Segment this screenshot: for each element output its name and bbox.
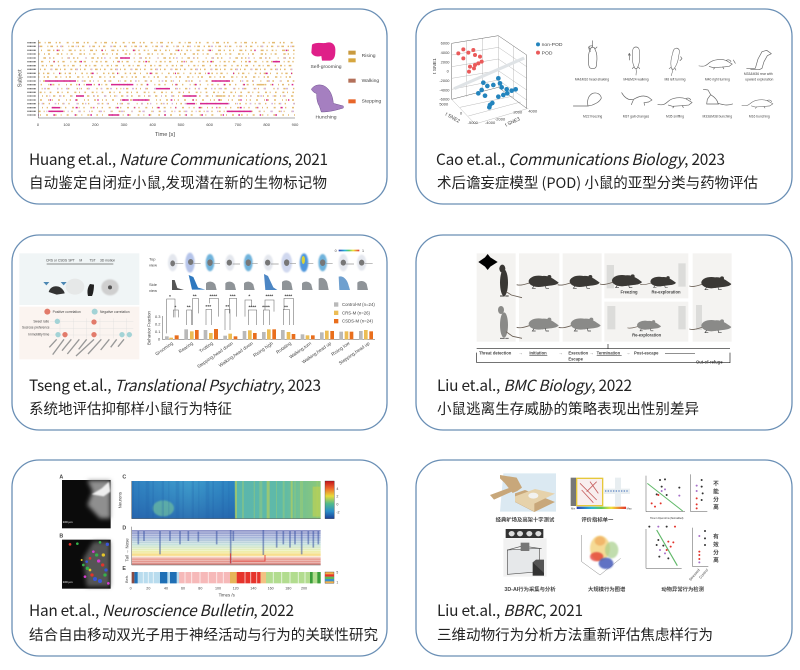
description: 系统地评估抑郁样小鼠行为特征 <box>29 398 232 419</box>
body trace D: Tail → Nose <box>125 538 130 562</box>
escape sequence illustration: Out-of-refuge <box>696 359 723 364</box>
behaviour fraction bar chart: ** <box>284 305 288 311</box>
behaviour fraction bar chart: Walking,head up <box>301 340 333 365</box>
3D t-SNE scatter plot: -4000 <box>485 120 496 125</box>
description: 自动鉴定自闭症小鼠,发现潜在新的生物标记物 <box>29 172 327 193</box>
workflow and correlation figure: CRS or CSDS <box>46 258 68 262</box>
scatter plots: not separable: Time in Open Arms (Normalized) <box>650 516 683 520</box>
ethogram E: Times /s <box>219 593 235 598</box>
behaviour fraction bar chart: 0 <box>158 336 161 341</box>
two-photon images A and B <box>59 474 111 589</box>
description: 三维动物行为分析方法重新评估焦虑样行为 <box>437 624 713 645</box>
workflow and correlation figure: Immobility time <box>28 332 50 336</box>
workflow and correlation figure <box>19 253 139 359</box>
behaviour mouse sketches: M33&M38 bunching <box>703 114 732 118</box>
scatter plots: not separable: 能 <box>713 487 719 495</box>
3D t-SNE scatter plot: t SNE3 <box>504 116 521 128</box>
citation: Han et.al., Neuroscience Bulletin, 2022 <box>29 599 294 621</box>
two-photon images A and B: B <box>59 534 63 540</box>
panel: Han et al. <box>12 460 387 656</box>
scatter plots: separable: 分 <box>713 548 719 556</box>
ethogram E: 5 <box>336 571 338 575</box>
behaviour fraction bar chart: Walking,turn <box>288 340 313 360</box>
escape sequence illustration: Initiation <box>529 350 547 355</box>
scatter plots: separable: 动物异常行为检测 <box>661 585 704 593</box>
3D t-SNE scatter plot: 5000 <box>439 101 449 106</box>
raster chart of behaviours: 100 <box>63 122 71 127</box>
workflow and correlation figure: Positive correlation <box>53 310 81 314</box>
ethogram E: Beh. <box>124 575 129 583</box>
3D t-SNE scatter plot: non-POD <box>542 42 563 48</box>
3D t-SNE scatter plot <box>432 36 563 128</box>
two-photon images A and B: 100 µm <box>63 580 73 584</box>
two-photon images A and B: A <box>59 474 63 480</box>
body trace D: D <box>122 526 126 532</box>
behaviour fraction bar chart: ** <box>193 294 197 300</box>
ethogram E: E <box>122 566 126 572</box>
neuron activity heatmap C <box>117 474 340 519</box>
behaviour fraction bar chart: Rearing <box>178 340 194 354</box>
behaviour mouse sketches: M8 left turning <box>664 78 686 82</box>
behaviour atlas <box>582 535 626 593</box>
3D t-SNE scatter plot: 0 <box>447 69 450 74</box>
behaviour fraction bar chart: **** <box>262 305 270 311</box>
behaviour fraction bar chart: Behavior Fraction <box>147 310 152 345</box>
behaviour fraction bar chart: Stepping,head down <box>196 340 234 369</box>
neuron activity heatmap C: 4 <box>336 487 338 491</box>
3D t-SNE scatter plot: -2000 <box>439 78 450 83</box>
behaviour fraction bar chart: Grooming <box>154 340 174 357</box>
workflow and correlation figure: Sucrose preference <box>22 326 50 330</box>
3D t-SNE scatter plot: 4000 <box>441 50 450 55</box>
behaviour mouse sketches <box>573 41 774 118</box>
maze illustration <box>490 473 556 523</box>
escape sequence illustration: Termination <box>597 350 621 355</box>
citation: Liu et.al., BMC Biology, 2022 <box>437 374 632 396</box>
workflow and correlation figure: Negative correlation <box>100 310 130 314</box>
legend with mice: Walking <box>362 78 379 84</box>
escape sequence illustration: Re-exploration <box>632 332 662 337</box>
ethogram E: 40 <box>164 587 168 591</box>
ethogram E <box>122 566 338 598</box>
behaviour fraction bar chart: Rising high <box>252 340 274 358</box>
behaviour fraction bar chart: *** <box>205 304 211 310</box>
3D t-SNE scatter plot: 4000 <box>528 109 538 114</box>
behaviour fraction bar chart: Walking,head down <box>218 340 254 368</box>
behaviour mouse sketches: M40 right turning <box>705 78 730 82</box>
panel: Tseng et al. <box>12 235 387 430</box>
behaviour fraction bar chart: 0.3 <box>155 314 161 319</box>
ethogram E: 80 <box>198 587 202 591</box>
behaviour fraction bar chart: Rotating <box>275 340 293 355</box>
scatter plots: not separable <box>646 474 719 520</box>
ethogram E: 100 <box>215 587 221 591</box>
raster chart of behaviours: 400 <box>149 122 157 127</box>
behaviour mouse sketches: M37 gait-changes <box>623 114 650 118</box>
workflow and correlation figure: 3D motion <box>100 258 115 262</box>
behaviour fraction bar chart: * <box>174 305 176 311</box>
raster chart of behaviours: 900 <box>292 122 299 127</box>
ethogram E: 0 <box>130 587 132 591</box>
escape sequence illustration: → <box>558 350 562 355</box>
raster chart of behaviours: Subject <box>18 69 24 87</box>
trajectory metric: Max <box>627 506 632 510</box>
behaviour mouse sketches: M16 bunching <box>749 114 770 118</box>
behaviour fraction bar chart <box>147 294 375 369</box>
behaviour fraction bar chart: **** <box>265 294 273 300</box>
behaviour fraction bar chart: 0.1 <box>155 329 161 334</box>
panel: Liu et al. BBRC <box>416 460 792 656</box>
trajectory metric <box>571 478 632 523</box>
legend with mice: Hunching <box>315 115 337 121</box>
behaviour atlas: 大规模行为图谱 <box>588 585 626 593</box>
scatter plots: not separable: 不 <box>713 480 719 487</box>
3D t-SNE scatter plot: -2000 <box>495 117 506 122</box>
behaviour fraction bar chart: **** <box>209 294 217 300</box>
behaviour fraction bar chart: **** <box>284 294 292 300</box>
3D t-SNE scatter plot: 6000 <box>441 41 450 46</box>
neuron activity heatmap C: C <box>122 474 126 480</box>
escape sequence illustration: Escape <box>568 356 584 361</box>
pose heat-map rows: view <box>149 263 157 268</box>
pose heat-map rows: 0 <box>335 249 337 253</box>
3D t-SNE scatter plot: t SNE1 <box>432 58 438 74</box>
legend with mice: Rising <box>362 53 376 59</box>
neuron activity heatmap C: -2 <box>336 511 340 515</box>
ethogram E: 20 <box>146 587 150 591</box>
behaviour mouse sketches: M22 freezing <box>583 114 602 118</box>
behaviour mouse sketches: M35 sniffing <box>666 114 684 118</box>
workflow and correlation figure: Sweet ratio <box>33 319 49 323</box>
behaviour fraction bar chart: 0.2 <box>155 322 161 327</box>
escape sequence illustration: → <box>518 350 522 355</box>
workflow and correlation figure: SPT <box>68 258 75 262</box>
3D t-SNE scatter plot: -4000 <box>439 87 450 92</box>
3D t-SNE scatter plot: POD <box>542 50 553 56</box>
scatter plots: separable: 离 <box>713 556 719 564</box>
legend with mice: Self-grooming <box>310 64 342 70</box>
scatter plots: separable: 有 <box>713 532 719 540</box>
ethogram E: 120 <box>233 587 239 591</box>
raster chart of behaviours: 300 <box>121 122 128 127</box>
raster chart of behaviours: 600 <box>206 122 214 127</box>
raster chart of behaviours: 500 <box>178 122 185 127</box>
3D t-SNE scatter plot: 2000 <box>441 59 450 64</box>
citation: Liu et.al., BBRC, 2021 <box>437 599 583 621</box>
behaviour fraction bar chart: **** <box>248 305 256 311</box>
scatter plots: not separable: 离 <box>713 503 719 511</box>
description: 术后谵妄症模型 (POD) 小鼠的亚型分类与药物评估 <box>437 172 758 193</box>
3D t-SNE scatter plot: 2000 <box>513 109 523 114</box>
escape sequence illustration: Post-escape <box>634 350 659 355</box>
behaviour fraction bar chart: *** <box>230 294 236 300</box>
ethogram E: 1 <box>336 581 338 585</box>
scatter plots: separable: Control <box>698 568 709 580</box>
behaviour fraction bar chart: CRS-M (n=26) <box>342 310 371 315</box>
citation: Huang et.al., Nature Communications, 2021 <box>29 148 328 170</box>
citation: Tseng et.al., Translational Psychiatry, 2023 <box>29 374 321 396</box>
neuron activity heatmap C: 2 <box>336 494 338 498</box>
pose heat-map rows <box>149 249 373 293</box>
workflow and correlation figure: TST <box>89 258 96 262</box>
behaviour mouse sketches: upward exploration <box>745 78 774 82</box>
behaviour fraction bar chart: ** <box>187 305 191 311</box>
3D t-SNE scatter plot: t SNE2 <box>444 112 461 125</box>
panel: Huang et al. <box>12 9 387 204</box>
behaviour fraction bar chart: Trotting <box>198 340 214 354</box>
raster chart of behaviours <box>18 40 299 138</box>
escape sequence illustration: Freezing <box>620 289 638 294</box>
maze illustration: 经典旷场及高架十字测试 <box>496 515 555 523</box>
3D t-SNE scatter plot: -5000 <box>468 120 479 125</box>
escape sequence illustration: Execution → <box>568 350 594 355</box>
ethogram E: 180 <box>285 587 291 591</box>
legend with mice <box>310 42 382 121</box>
scatter plots: separable: Stressed <box>688 568 701 582</box>
escape sequence illustration <box>477 253 732 364</box>
scatter plots: not separable: 分 <box>713 495 719 503</box>
pose heat-map rows: Top <box>149 257 156 262</box>
behaviour fraction bar chart: * <box>169 294 171 300</box>
raster chart of behaviours: 200 <box>92 122 99 127</box>
pose heat-map rows: Side <box>149 282 158 287</box>
trajectory metric: Min <box>571 506 576 510</box>
ethogram E: 60 <box>181 587 185 591</box>
body trace D <box>122 526 321 565</box>
behaviour fraction bar chart: Rising low <box>330 340 351 357</box>
behaviour fraction bar chart: * <box>248 294 250 300</box>
3D t-SNE scatter plot: -6000 <box>439 97 450 102</box>
description: 小鼠逃离生存威胁的策略表现出性别差异 <box>437 398 699 419</box>
scatter plots: separable: 效 <box>713 540 719 548</box>
behaviour fraction bar chart: Control-M (n=24) <box>342 302 375 307</box>
behaviour fraction bar chart: ** <box>225 304 229 310</box>
behaviour fraction bar chart: Stepping,head up <box>338 340 371 366</box>
panel: Cao et al. <box>416 9 792 204</box>
panel: Liu et al. BMC Biology <box>416 235 792 430</box>
behaviour fraction bar chart: CSDS-M (n=24) <box>342 319 373 324</box>
behaviour mouse sketches: M4&M24 walking <box>623 78 649 82</box>
ethogram E: 200 <box>301 587 307 591</box>
description: 结合自由移动双光子用于神经活动与行为的关联性研究 <box>29 624 378 645</box>
3D-AI acquisition device <box>503 529 556 593</box>
behaviour mouse sketches: M33&M36 rear with <box>744 72 773 76</box>
behaviour mouse sketches: M4&M10 head-shaking <box>575 78 609 82</box>
trajectory metric: 评价指标单一 <box>581 515 614 523</box>
3D-AI acquisition device: 3D-AI行为采集与分析 <box>504 585 556 593</box>
neuron activity heatmap C: Neurons <box>117 492 122 508</box>
ethogram E: 160 <box>268 587 274 591</box>
citation: Cao et.al., Communications Biology, 2023 <box>436 148 725 170</box>
3D t-SNE scatter plot: 0 <box>460 111 463 116</box>
pose heat-map rows: view <box>149 288 157 293</box>
raster chart of behaviours: Time [s] <box>155 132 175 138</box>
neuron activity heatmap C: 0 <box>336 503 338 507</box>
escape sequence illustration: → <box>626 350 630 355</box>
raster chart of behaviours: 0 <box>37 122 40 127</box>
pose heat-map rows: 1 <box>362 249 364 253</box>
escape sequence illustration: Threat detection <box>479 350 512 355</box>
raster chart of behaviours: 700 <box>235 122 242 127</box>
scatter plots: separable <box>646 526 719 593</box>
two-photon images A and B: 100 µm <box>63 520 73 524</box>
legend with mice: Stepping <box>362 98 382 104</box>
escape sequence illustration: Re-exploration <box>651 289 681 294</box>
ethogram E: 140 <box>250 587 256 591</box>
workflow and correlation figure: M <box>79 258 82 262</box>
raster chart of behaviours: 800 <box>263 122 271 127</box>
